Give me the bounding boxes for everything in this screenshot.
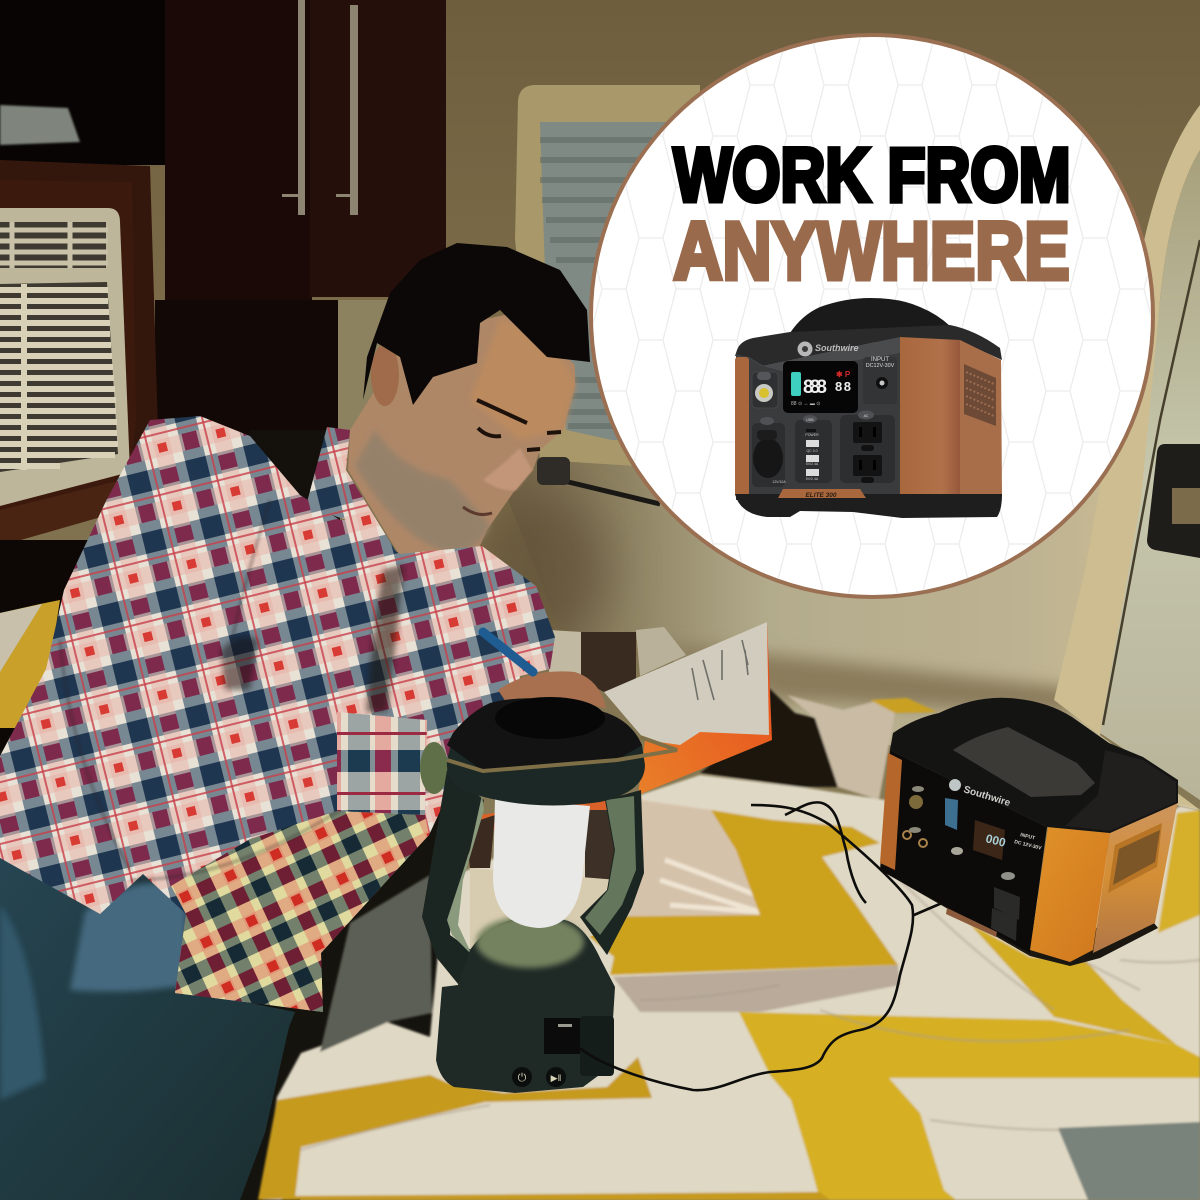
lantern: USB port	[544, 1016, 614, 1076]
station: brand: Southwire	[962, 784, 1012, 809]
product: model badge	[778, 489, 866, 499]
wristwatch	[420, 742, 448, 794]
lantern: gold trim	[447, 737, 677, 771]
lantern: left arm	[422, 770, 484, 990]
product: brand logo	[798, 342, 859, 356]
station: left copper strip	[880, 753, 902, 870]
window blinds	[515, 85, 700, 470]
product: front copper panel	[900, 337, 960, 496]
power station on bed	[880, 698, 1178, 966]
product: left copper strip	[735, 357, 749, 497]
product: USB ports: USB	[806, 418, 814, 422]
product: input port	[863, 357, 897, 404]
product: top shell	[735, 325, 1002, 366]
station: display: 000	[984, 831, 1007, 850]
camper door	[1054, 105, 1200, 800]
person: shoulder background	[250, 430, 340, 530]
product: AC outlets	[840, 410, 895, 483]
person: ear	[371, 344, 399, 406]
station: orange front panel	[1030, 827, 1110, 962]
product: LCD display: 88 ⊙ ↔ ▬ ⊙	[791, 401, 820, 407]
product: LCD display: ✱ P	[836, 370, 851, 379]
heading: work from: WORK FROM	[674, 133, 1070, 218]
product: USB ports: QC 3.0	[806, 449, 818, 453]
shelf tissue	[0, 105, 80, 145]
station: input label	[1014, 832, 1043, 852]
product: USB ports: POWER	[805, 433, 819, 437]
cabinet	[0, 0, 446, 500]
circle callout	[589, 33, 1155, 599]
product: vent	[964, 364, 996, 426]
power cable	[580, 802, 956, 1090]
station: shadow	[880, 870, 1158, 966]
lantern: cap ring	[447, 737, 645, 805]
person: shirt tail	[171, 811, 429, 1012]
station: top and handle	[890, 698, 1178, 833]
cabinet: handles	[282, 0, 358, 215]
door latch	[1147, 444, 1200, 558]
behind lantern	[465, 810, 618, 985]
rear pillows	[549, 627, 686, 692]
product: Southwire Elite 300 power station	[735, 298, 1002, 518]
station: knobs	[903, 786, 1015, 880]
person: nose and mouth	[483, 448, 532, 490]
product: USB ports: 5V/2.4A	[806, 462, 819, 466]
product: light button	[752, 372, 778, 408]
station: display	[945, 798, 1007, 860]
person: plaid shirt	[0, 416, 555, 1012]
lantern: buttons: ⏻	[518, 1072, 527, 1084]
product: upper face plate	[763, 337, 900, 372]
lantern: buttons: ▶ǁ	[551, 1073, 561, 1083]
product: USB ports: 5V/2.4A	[806, 477, 819, 481]
heading: anywhere: ANYWHERE	[674, 206, 1070, 297]
air conditioner	[0, 160, 160, 612]
curtain rod	[537, 457, 660, 504]
product: top dome	[790, 298, 950, 345]
product: side panel	[960, 340, 1002, 496]
product: bottom bumper	[735, 494, 1002, 518]
product: front face	[736, 337, 900, 500]
lantern: cap	[447, 698, 642, 771]
lantern: buttons	[512, 1067, 566, 1087]
person: shirt cuff	[337, 712, 427, 815]
lantern: white globe	[493, 798, 590, 928]
lantern: right arm	[580, 790, 644, 955]
product: AC outlets: AC	[864, 414, 869, 418]
station: outlets	[991, 887, 1020, 941]
person: neck and face	[348, 312, 575, 556]
station: brand	[949, 779, 1012, 809]
dark under-bed area	[0, 750, 460, 1200]
person: hair	[363, 243, 590, 405]
product: LCD display: 88	[835, 379, 851, 394]
station: input label: DC 12V-30V	[1014, 839, 1043, 852]
notebook	[478, 622, 772, 832]
station: speaker vent	[1108, 823, 1162, 893]
station: side panel	[1093, 800, 1178, 953]
product: input port: INPUT	[871, 357, 889, 363]
person: jeans	[0, 858, 295, 1200]
product: model badge: ELITE 300	[805, 492, 837, 499]
product: DC port: 12V/10A	[772, 480, 786, 484]
hexagon background pattern	[593, 37, 1151, 595]
lantern	[422, 697, 677, 1093]
bedding	[258, 688, 1200, 1200]
station: input label: INPUT	[1020, 832, 1036, 842]
product: input port: DC12V-30V	[866, 363, 895, 369]
person: shirt collar	[306, 427, 398, 555]
person: hand	[498, 671, 606, 708]
station: front face	[880, 750, 1047, 953]
product: LCD display	[783, 361, 858, 413]
product: brand logo: Southwire	[815, 343, 859, 353]
lantern: base body	[436, 917, 615, 1093]
product: USB ports	[795, 415, 832, 483]
product: LCD display: 888	[803, 377, 827, 398]
product: DC port	[752, 417, 786, 487]
pen	[483, 632, 533, 672]
person: eyes and brows	[477, 400, 561, 450]
station: trim	[946, 908, 997, 937]
left pillow	[0, 600, 90, 760]
